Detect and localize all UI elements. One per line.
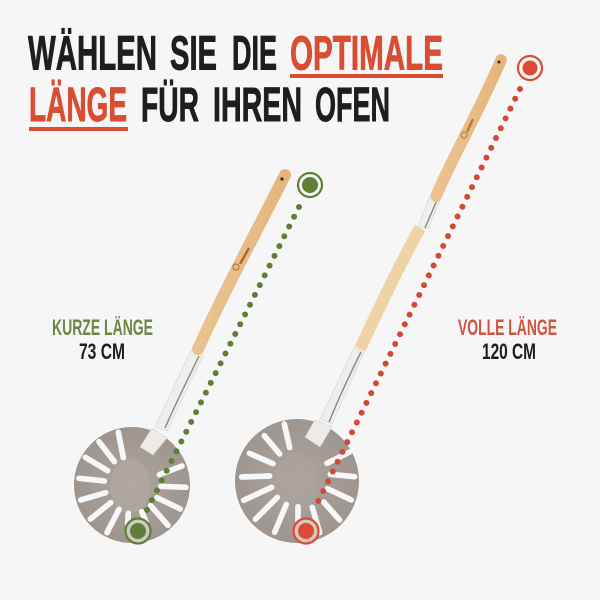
title: WÄHLEN xyxy=(28,28,157,80)
metal neck and blade xyxy=(305,348,364,447)
marker: green bottom xyxy=(126,518,150,544)
perforated disc xyxy=(235,419,359,543)
title xyxy=(28,28,443,132)
metal connector xyxy=(418,196,440,229)
wooden handle xyxy=(198,175,285,349)
label: short length xyxy=(52,315,153,364)
long pizza peel xyxy=(235,60,501,543)
title: SIE xyxy=(170,28,217,80)
upper wooden handle xyxy=(436,60,501,196)
marker: red top xyxy=(518,56,542,80)
label: full length xyxy=(458,315,557,364)
marker: red bottom xyxy=(294,518,318,544)
label: short length: 73 CM xyxy=(79,339,125,364)
label: full length: 120 CM xyxy=(482,339,536,364)
title: OPTIMALE xyxy=(290,28,443,80)
title: DIE xyxy=(232,28,277,80)
title: FÜR xyxy=(141,79,199,132)
metal neck and blade xyxy=(140,350,203,455)
lower wooden handle xyxy=(360,228,420,349)
label: short length: KURZE LÄNGE xyxy=(52,315,153,340)
red dotted line xyxy=(314,89,520,510)
title: LÄNGE xyxy=(29,79,127,132)
title: IHREN xyxy=(213,79,302,132)
title: OFEN xyxy=(315,79,390,132)
perforated disc xyxy=(74,427,190,543)
short pizza peel xyxy=(74,175,285,543)
green dotted line xyxy=(147,207,299,510)
marker: green top xyxy=(298,173,322,197)
